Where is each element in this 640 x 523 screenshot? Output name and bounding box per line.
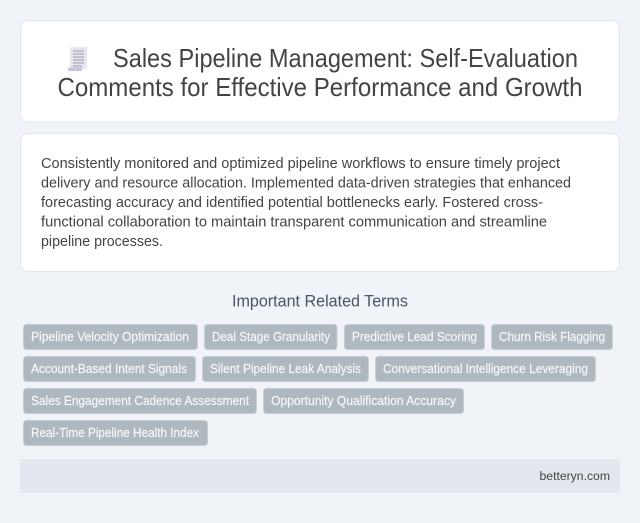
title: Comments for Effective Performance and Growth <box>58 74 582 102</box>
tag: deal stage: Deal Stage Granularity <box>212 330 331 344</box>
tag: silent pipeline leak: Silent Pipeline Leak Analysis <box>210 362 361 376</box>
text block: self-evaluation summary: pipeline processes. <box>41 234 163 250</box>
text block: self-evaluation summary: Consistently monitored and optimized pipeline workflows to ensure timely project <box>41 156 560 172</box>
text block: self-evaluation summary: delivery and resource allocation. Implemented data-driven strategies that enhanced <box>41 176 571 192</box>
panel: header card <box>20 20 620 122</box>
footer bar <box>20 459 620 493</box>
tag: predictive lead scoring: Predictive Lead Scoring <box>352 330 477 344</box>
tag: silent pipeline leak <box>202 356 368 382</box>
tag: predictive lead scoring <box>344 324 484 350</box>
tag list <box>24 324 612 446</box>
tag: conversational intelligence <box>376 356 596 382</box>
text block: self-evaluation summary: forecasting accuracy and identified potential bottlenecks early. Fostered cross- <box>41 195 543 211</box>
text block: self-evaluation summary: functional collaboration to maintain transparent communication and streamline <box>41 214 547 230</box>
text block: self-evaluation summary <box>41 156 571 250</box>
tag: pipeline velocity <box>24 324 198 350</box>
tag: account-based intent <box>24 356 196 382</box>
tag: pipeline velocity: Pipeline Velocity Optimization <box>31 330 189 344</box>
heading: important related terms: Important Related Terms <box>232 292 408 310</box>
tag: deal stage <box>204 324 337 350</box>
tag: real-time health index <box>24 420 208 446</box>
tag: sales engagement cadence <box>24 388 256 414</box>
tag: churn risk <box>492 324 612 350</box>
tag: account-based intent: Account-Based Intent Signals <box>31 362 187 376</box>
icon: document scroll <box>68 48 87 71</box>
panel: summary card <box>20 134 620 272</box>
tag: conversational intelligence: Conversational Intelligence Leveraging <box>383 362 588 376</box>
footer: site name: betteryn.com <box>540 469 610 483</box>
title <box>58 45 582 102</box>
tag: sales engagement cadence: Sales Engagement Cadence Assessment <box>31 394 249 408</box>
tag: churn risk: Churn Risk Flagging <box>499 330 605 344</box>
tag: real-time health index: Real-Time Pipeline Health Index <box>31 426 200 440</box>
tag: opportunity qualification <box>264 388 464 414</box>
tag: opportunity qualification: Opportunity Qualification Accuracy <box>271 394 457 408</box>
title: Sales Pipeline Management: Self-Evaluation <box>113 45 578 73</box>
